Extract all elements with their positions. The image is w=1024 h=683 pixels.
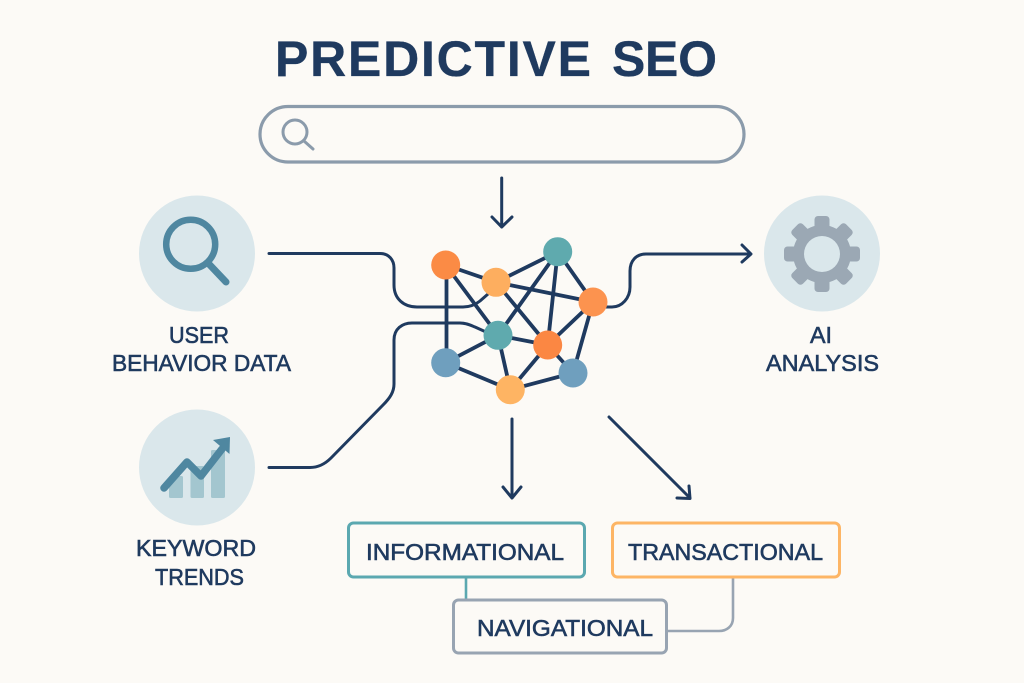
box: informational: INFORMATIONAL bbox=[366, 539, 564, 565]
label: user behavior data: USER bbox=[169, 322, 229, 348]
box: transactional bbox=[612, 523, 840, 577]
label: keyword trends: KEYWORD bbox=[136, 535, 256, 561]
box: navigational bbox=[454, 600, 666, 653]
icon: search magnifier bbox=[283, 120, 313, 149]
panel: AI analysis bbox=[764, 196, 880, 376]
connector: informational to navigational bbox=[465, 577, 467, 599]
icon: gear in circle bbox=[764, 196, 880, 312]
connector: user behavior data to network bbox=[269, 254, 488, 307]
title: SEO bbox=[612, 31, 717, 87]
icon: magnifier in circle bbox=[139, 196, 255, 312]
search bar bbox=[260, 106, 744, 162]
connector: transactional to navigational bbox=[667, 577, 733, 631]
panel: user behavior data bbox=[112, 196, 292, 376]
panel: keyword trends bbox=[136, 410, 256, 590]
title: PREDICTIVE bbox=[275, 31, 591, 87]
network nodes bbox=[431, 237, 608, 404]
network edges bbox=[446, 252, 593, 390]
arrow: search to network bbox=[492, 178, 512, 227]
icon: trend chart in circle bbox=[139, 410, 255, 526]
label: keyword trends: TRENDS bbox=[155, 564, 244, 590]
label: user behavior data bbox=[112, 322, 292, 376]
arrow: network to transactional bbox=[609, 417, 690, 498]
arrow: network to informational bbox=[503, 419, 521, 498]
label: AI analysis: AI bbox=[810, 322, 832, 348]
connector: keyword trends to network bbox=[269, 323, 486, 468]
label: keyword trends bbox=[136, 535, 256, 590]
connector: network to AI analysis bbox=[606, 245, 751, 307]
network graph bbox=[431, 237, 608, 404]
label: AI analysis bbox=[766, 322, 879, 376]
label: AI analysis: ANALYSIS bbox=[766, 350, 879, 376]
box: informational bbox=[348, 523, 584, 577]
box: transactional: TRANSACTIONAL bbox=[628, 539, 823, 565]
label: user behavior data: BEHAVIOR DATA bbox=[112, 350, 292, 376]
box: navigational: NAVIGATIONAL bbox=[477, 615, 653, 641]
